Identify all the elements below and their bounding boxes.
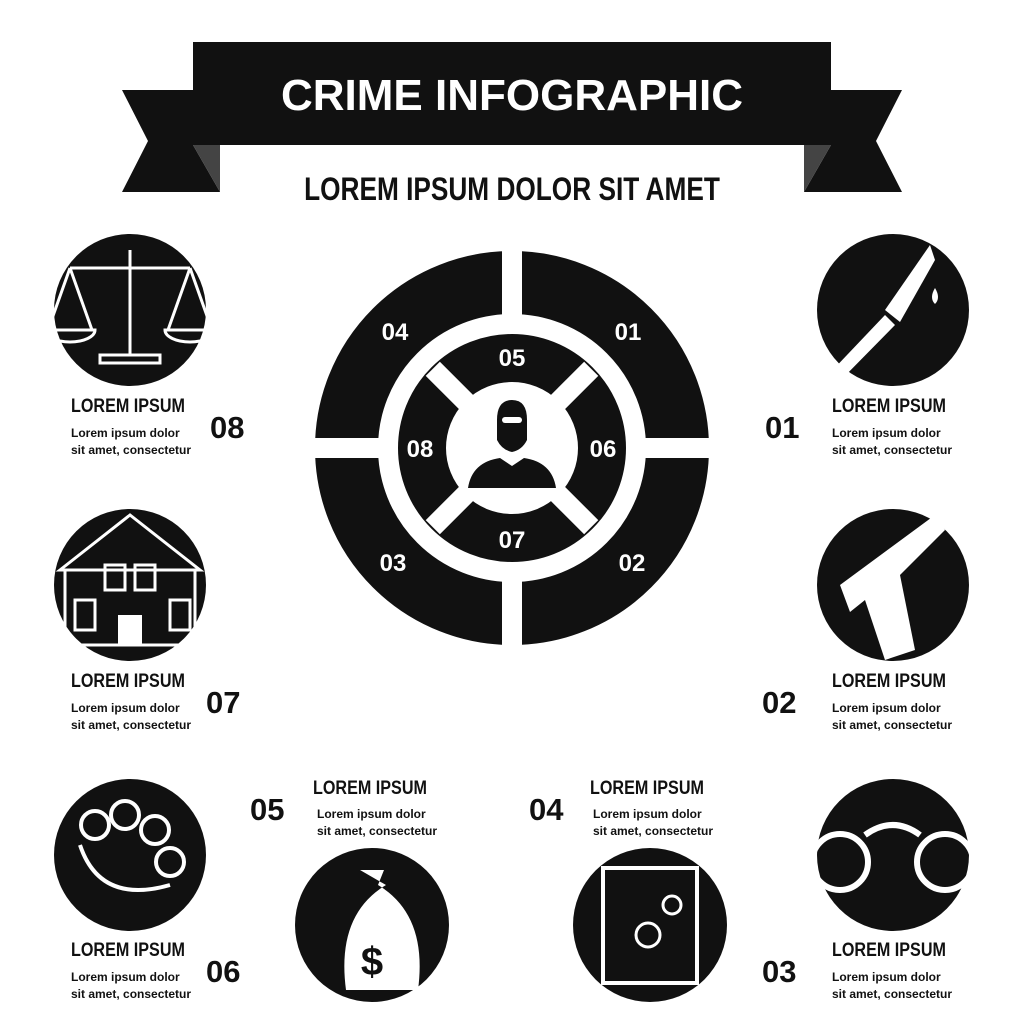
text: Lorem ipsum dolor xyxy=(71,701,180,715)
subtitle: LOREM IPSUM DOLOR SIT AMET xyxy=(304,173,720,208)
text: sit amet, consectetur xyxy=(832,987,952,1001)
text: LOREM IPSUM xyxy=(832,940,946,961)
banner title: CRIME INFOGRAPHIC xyxy=(281,71,743,120)
banner title xyxy=(193,42,831,145)
center chart: 04 xyxy=(382,319,409,346)
text: sit amet, consectetur xyxy=(593,824,713,838)
text: Lorem ipsum dolor xyxy=(71,970,180,984)
text: sit amet, consectetur xyxy=(71,718,191,732)
block 03 xyxy=(762,940,952,1001)
text: LOREM IPSUM xyxy=(71,396,185,417)
icon: handcuffs xyxy=(812,779,973,931)
center chart: 03 xyxy=(380,550,406,577)
text: 08 xyxy=(210,410,244,445)
center chart: 01 xyxy=(615,319,641,346)
block 01 xyxy=(765,396,952,457)
text: LOREM IPSUM xyxy=(832,671,946,692)
icon: gun xyxy=(817,509,969,661)
icon: scales xyxy=(45,234,215,386)
ribbon tail right xyxy=(804,90,902,192)
text: Lorem ipsum dolor xyxy=(71,426,180,440)
text: 02 xyxy=(762,685,796,720)
text: sit amet, consectetur xyxy=(832,443,952,457)
text: LOREM IPSUM xyxy=(832,396,946,417)
icon: knife xyxy=(817,234,969,386)
icon: brass knuckles xyxy=(54,779,206,931)
banner xyxy=(122,42,902,208)
center chart xyxy=(315,251,709,645)
text: LOREM IPSUM xyxy=(313,778,427,799)
text: 04 xyxy=(529,792,563,827)
center chart: 02 xyxy=(619,550,645,577)
icon: safe xyxy=(573,848,727,1002)
icon: money bag xyxy=(295,848,449,1002)
block 05 xyxy=(250,778,437,838)
icon: money bag: $ xyxy=(361,940,383,984)
text: 03 xyxy=(762,954,796,989)
text: Lorem ipsum dolor xyxy=(832,970,941,984)
text: Lorem ipsum dolor xyxy=(832,426,941,440)
block 06 xyxy=(71,940,240,1001)
text: LOREM IPSUM xyxy=(71,671,185,692)
ribbon tail left xyxy=(122,90,220,192)
block 02 xyxy=(762,671,952,732)
center chart: 07 xyxy=(499,527,525,554)
text: 07 xyxy=(206,685,240,720)
text: sit amet, consectetur xyxy=(71,987,191,1001)
text: LOREM IPSUM xyxy=(590,778,704,799)
block 04 xyxy=(529,778,713,838)
text: sit amet, consectetur xyxy=(317,824,437,838)
text: 01 xyxy=(765,410,799,445)
text: Lorem ipsum dolor xyxy=(832,701,941,715)
center chart: 05 xyxy=(499,345,525,372)
text: Lorem ipsum dolor xyxy=(317,807,426,821)
block 07 xyxy=(71,671,240,732)
center chart: 06 xyxy=(590,436,616,463)
block 08 xyxy=(71,396,244,457)
icon: masked criminal xyxy=(468,400,556,488)
text: sit amet, consectetur xyxy=(832,718,952,732)
text: 05 xyxy=(250,792,284,827)
center chart: 08 xyxy=(407,436,433,463)
text: sit amet, consectetur xyxy=(71,443,191,457)
text: LOREM IPSUM xyxy=(71,940,185,961)
icon: house xyxy=(54,509,206,661)
text: Lorem ipsum dolor xyxy=(593,807,702,821)
text: 06 xyxy=(206,954,240,989)
